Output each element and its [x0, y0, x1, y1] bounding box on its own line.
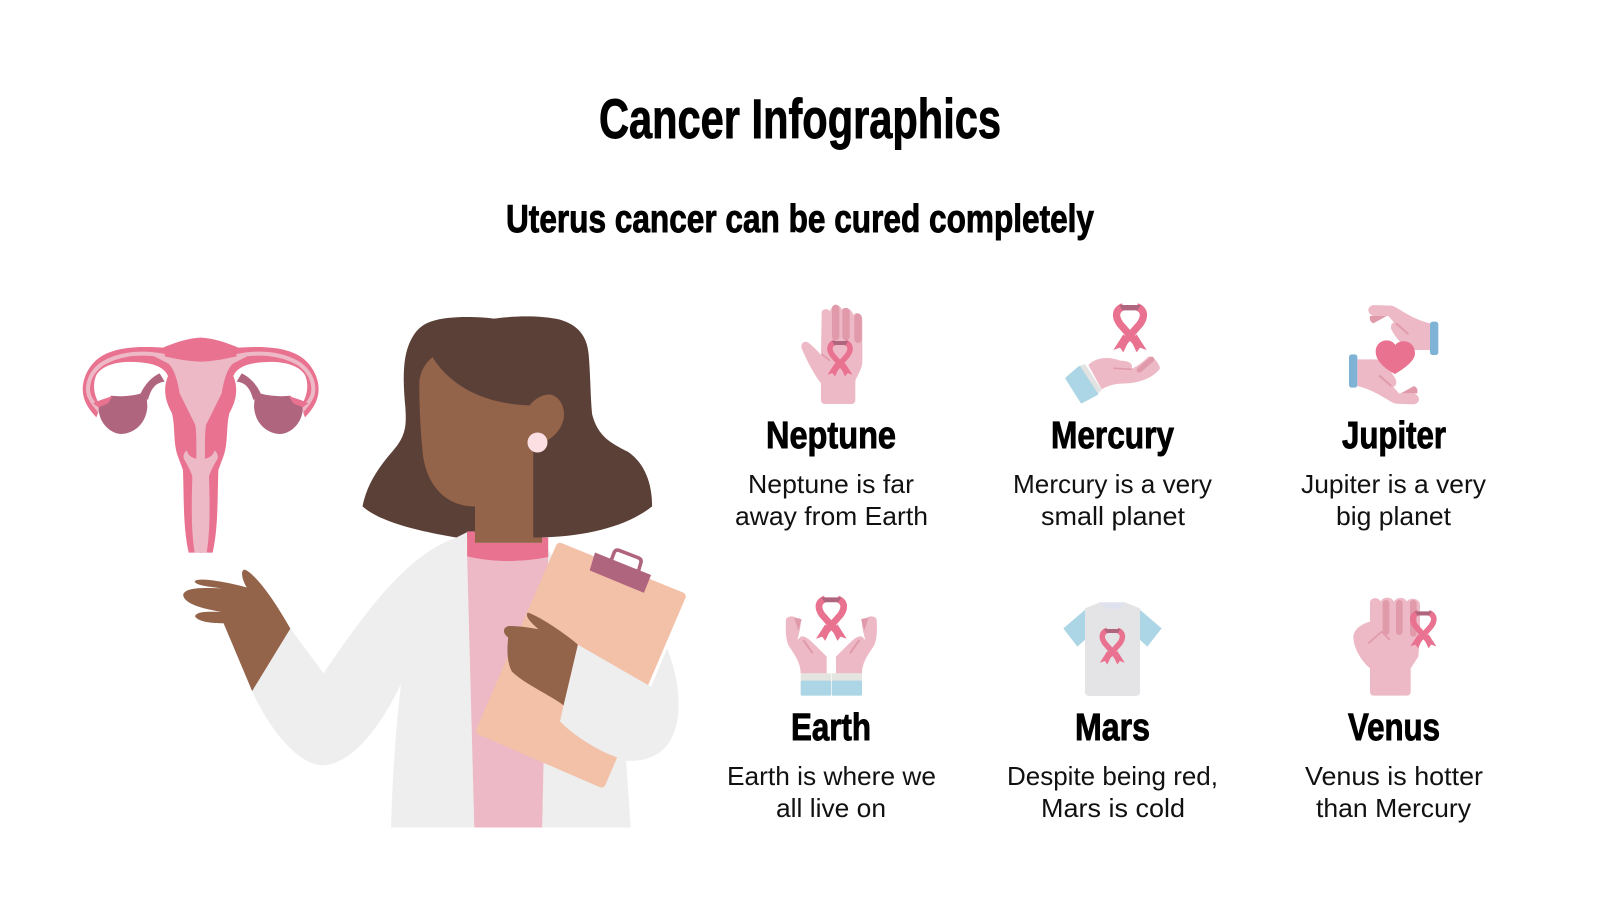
icon: hand with ribbon: [801, 305, 862, 404]
description: big planet: [1336, 501, 1452, 531]
panel: Mars: [1007, 602, 1218, 823]
description: [1301, 469, 1486, 531]
doctor shirt: [467, 556, 548, 827]
description: [1305, 761, 1483, 823]
panel: Neptune: [735, 305, 928, 531]
description: Venus is hotter: [1305, 761, 1483, 791]
description: [735, 469, 928, 531]
panel: Venus: [1305, 598, 1483, 823]
title: Cancer Infographics: [599, 87, 1001, 150]
icon: raised hands with ribbon: [786, 597, 877, 696]
illustration: uterus: [83, 338, 319, 553]
panel: Earth: [727, 597, 936, 823]
heading: Mercury: [1051, 415, 1174, 457]
left hand: [183, 570, 290, 691]
subtitle: Uterus cancer can be cured completely: [506, 198, 1094, 241]
description: [1007, 761, 1218, 823]
icon: fist with ribbon: [1353, 598, 1436, 696]
description: [727, 761, 936, 823]
doctor face and neck: [419, 357, 564, 543]
heading: Neptune: [766, 415, 896, 457]
description: away from Earth: [735, 501, 928, 531]
icon: hands around heart: [1349, 305, 1438, 404]
description: Mercury is a very: [1013, 469, 1212, 499]
description: Neptune is far: [748, 469, 914, 499]
heading: Jupiter: [1342, 415, 1446, 457]
icon: open hand under ribbon: [1067, 305, 1160, 402]
clipboard clip: [590, 550, 651, 593]
heading: Venus: [1348, 707, 1440, 749]
description: than Mercury: [1316, 793, 1471, 823]
description: Mars is cold: [1041, 793, 1185, 823]
right hand: [504, 612, 578, 705]
earring: [527, 432, 547, 452]
doctor lab coat: [252, 532, 631, 827]
doctor collar: [467, 531, 548, 561]
icon: t-shirt with ribbon: [1063, 602, 1162, 696]
illustration: doctor with clipboard: [183, 316, 681, 827]
doctor hair: [362, 316, 652, 537]
panel: Jupiter: [1301, 305, 1486, 531]
description: [1013, 469, 1212, 531]
description: Despite being red,: [1007, 761, 1218, 791]
heading: Earth: [791, 707, 871, 749]
description: all live on: [776, 793, 886, 823]
heading: Mars: [1075, 707, 1150, 749]
description: Earth is where we: [727, 761, 936, 791]
description: small planet: [1041, 501, 1186, 531]
description: Jupiter is a very: [1301, 469, 1486, 499]
panel: Mercury: [1013, 305, 1212, 531]
clipboard: [480, 547, 681, 783]
right sleeve: [560, 645, 679, 761]
